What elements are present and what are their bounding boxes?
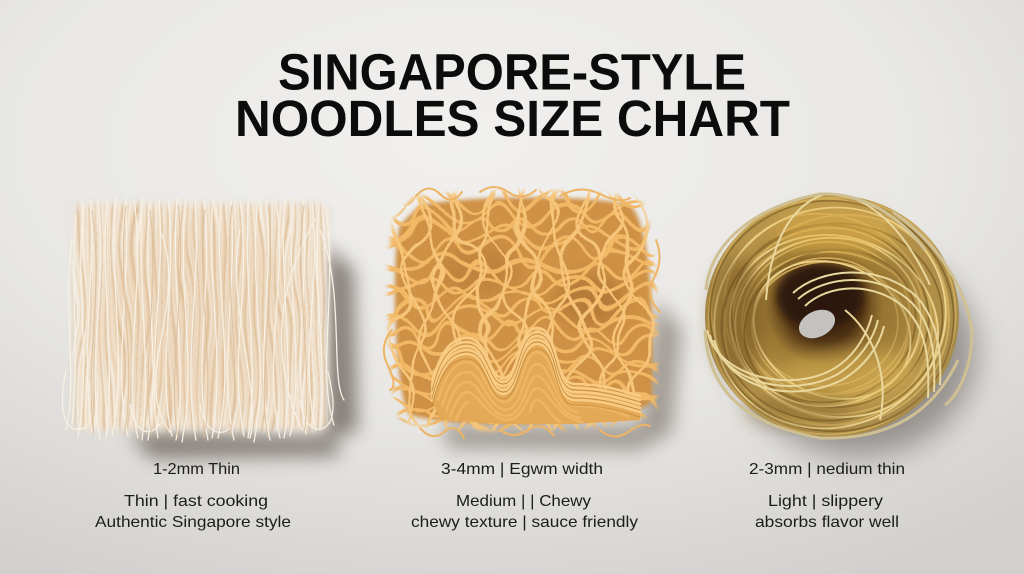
panel: medium-thin noodles [678,166,986,466]
nest centre hole [794,304,840,344]
caption: medium-thin noodles [749,461,905,531]
shadow: nest noodles [740,248,976,456]
panel: thin noodles [60,185,358,458]
caption: thin noodles: Authentic Singapore style [95,514,291,531]
panel: medium egg noodles [382,186,692,460]
nest tonal shading [712,208,924,426]
shadow: thin noodles [130,245,358,458]
caption: medium-thin noodles: absorbs flavor well [755,514,899,531]
caption: thin noodles: 1-2mm Thin [153,461,240,478]
caption: medium noodles: chewy texture | sauce friendly [411,514,638,531]
caption: medium noodles: Medium | | Chewy [456,493,591,510]
noodle nest: golden coil [678,166,986,466]
caption: medium noodles [411,461,638,531]
caption: thin noodles: Thin | fast cooking [124,493,268,510]
noodle block: thin rice vermicelli [60,185,350,450]
caption: medium-thin noodles: Light | slippery [768,493,883,510]
title [235,44,790,147]
noodle block: curly egg noodles [382,186,661,439]
curly stray loops [384,187,660,438]
outer loose strands [705,194,972,438]
wavy noodle bundle [430,328,640,424]
caption: medium noodles: 3-4mm | Egwm width [441,461,603,478]
shadow: medium noodles [440,300,682,450]
title: SINGAPORE-STYLE [278,44,746,100]
title: NOODLES SIZE CHART [235,90,790,147]
caption: thin noodles [95,461,291,531]
pale swirling strands [707,194,940,420]
caption: medium-thin noodles: 2-3mm | nedium thin [749,461,905,478]
